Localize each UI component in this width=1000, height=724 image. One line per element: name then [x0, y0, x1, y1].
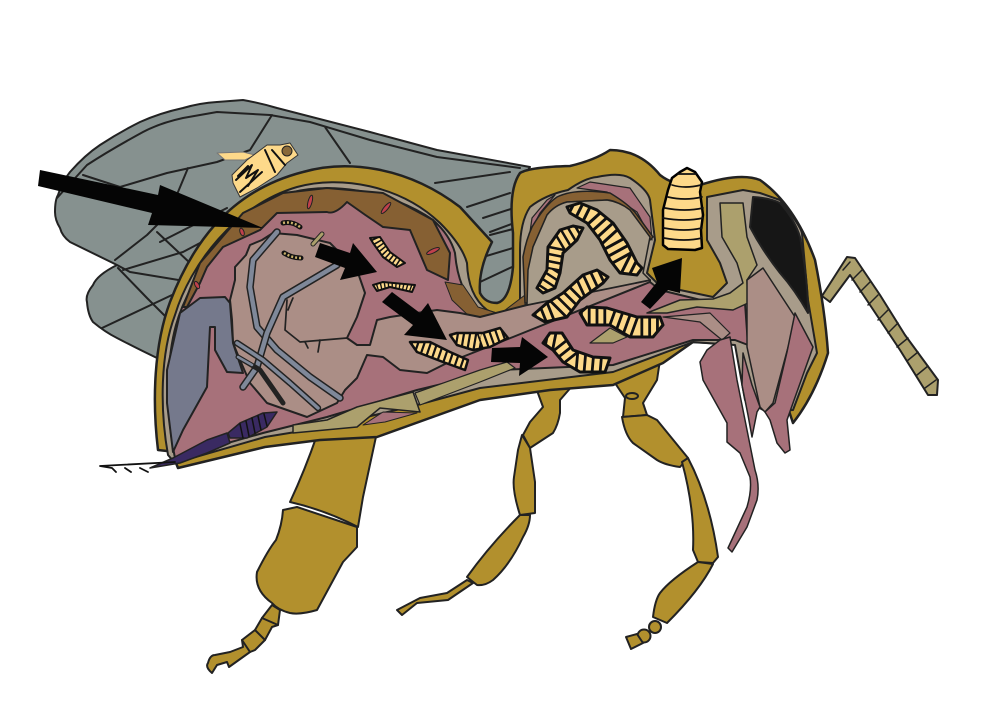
- larva 10: [537, 226, 583, 293]
- tube three: [237, 343, 318, 408]
- proboscis: [700, 337, 758, 552]
- thorax chamber lining pink: [530, 182, 652, 240]
- slate gland: [167, 297, 243, 452]
- arrow: to pupa: [641, 258, 682, 309]
- front lower: [653, 562, 713, 623]
- hind leg: [207, 432, 377, 673]
- larva 3: [370, 237, 405, 267]
- middle leg upper: [523, 385, 573, 448]
- larvae: [283, 203, 663, 372]
- fat body brown: [183, 188, 450, 307]
- small olive patch: [590, 328, 627, 343]
- arrow: larvae third move: [491, 337, 548, 376]
- larva small 2: [284, 253, 301, 258]
- arrows: [38, 170, 682, 376]
- mandibles: [742, 353, 760, 437]
- larva 4: [373, 282, 415, 292]
- pink body cavity: [168, 188, 748, 458]
- upper wing: [55, 100, 530, 303]
- gut folds: [285, 298, 347, 352]
- tube four: [238, 357, 283, 403]
- ovipositor body: [228, 412, 277, 438]
- front tibia: [682, 458, 718, 563]
- wings: [55, 100, 530, 358]
- sting sheath: [150, 433, 230, 468]
- middle leg foot: [397, 580, 473, 615]
- front foot: [649, 621, 661, 633]
- thorax chamber: [527, 200, 650, 305]
- fly head: [282, 146, 292, 156]
- larva 9: [580, 307, 663, 337]
- taupe thorax band: [663, 313, 730, 340]
- wing veins: [57, 112, 520, 328]
- ventral olive patch: [293, 392, 420, 433]
- femur: [290, 432, 377, 527]
- tube two: [243, 265, 337, 387]
- middle leg lower: [467, 515, 530, 585]
- sting: [100, 462, 175, 472]
- front coxa: [613, 360, 660, 417]
- front leg: [613, 360, 718, 649]
- middle leg segment: [514, 435, 535, 515]
- thin brown band under neck: [445, 282, 525, 323]
- head lobe: [747, 268, 795, 412]
- larva 11: [567, 203, 642, 275]
- antenna: [822, 257, 938, 395]
- red slits: [193, 195, 440, 289]
- front femur: [622, 415, 688, 467]
- ventral olive strip: [415, 362, 515, 405]
- tracheal tubes: [237, 232, 340, 408]
- tibia: [257, 507, 357, 614]
- middle leg: [397, 385, 573, 615]
- larva 5: [410, 342, 468, 370]
- fly body: [232, 143, 298, 197]
- body shell: [155, 150, 828, 468]
- thorax chamber brown: [523, 191, 653, 303]
- body lining: [163, 175, 817, 463]
- tarsus: [207, 605, 280, 673]
- ovipositor: [100, 412, 277, 472]
- larva 6: [450, 328, 508, 350]
- tube one: [250, 232, 340, 398]
- head pink: [765, 313, 813, 453]
- larva small 1: [283, 222, 300, 227]
- head olive and thorax band: [647, 203, 757, 313]
- arrow: larvae first move: [315, 243, 377, 280]
- gut: [230, 233, 650, 417]
- pupa: [663, 168, 703, 250]
- eye: [750, 197, 808, 313]
- lower wing: [87, 170, 515, 358]
- ventral pink patch: [363, 412, 417, 425]
- arrow: entering abdomen: [38, 170, 263, 228]
- larva 7: [543, 333, 610, 372]
- egg: [313, 234, 322, 244]
- fly wing: [217, 152, 255, 160]
- larva 8: [533, 270, 608, 322]
- arrow: larvae second move: [382, 292, 447, 340]
- parasitoid fly: [217, 143, 298, 197]
